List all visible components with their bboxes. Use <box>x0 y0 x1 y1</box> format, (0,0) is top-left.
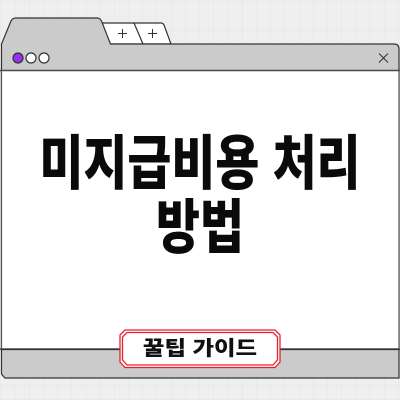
title: 미지급비용 처리 <box>39 131 361 197</box>
badge label: 꿀팁 가이드 <box>143 338 257 360</box>
content area <box>2 70 399 348</box>
badge frame <box>120 330 280 368</box>
white dot <box>26 53 36 63</box>
icon: plus 2 <box>148 29 157 38</box>
inactive tabs <box>102 23 171 44</box>
white dot 2 <box>39 53 49 63</box>
title <box>39 131 361 261</box>
bottom bar <box>2 350 399 378</box>
icon: close <box>379 54 388 62</box>
icon: plus <box>118 29 127 38</box>
purple dot <box>13 53 23 63</box>
title: 방법 <box>156 195 244 261</box>
